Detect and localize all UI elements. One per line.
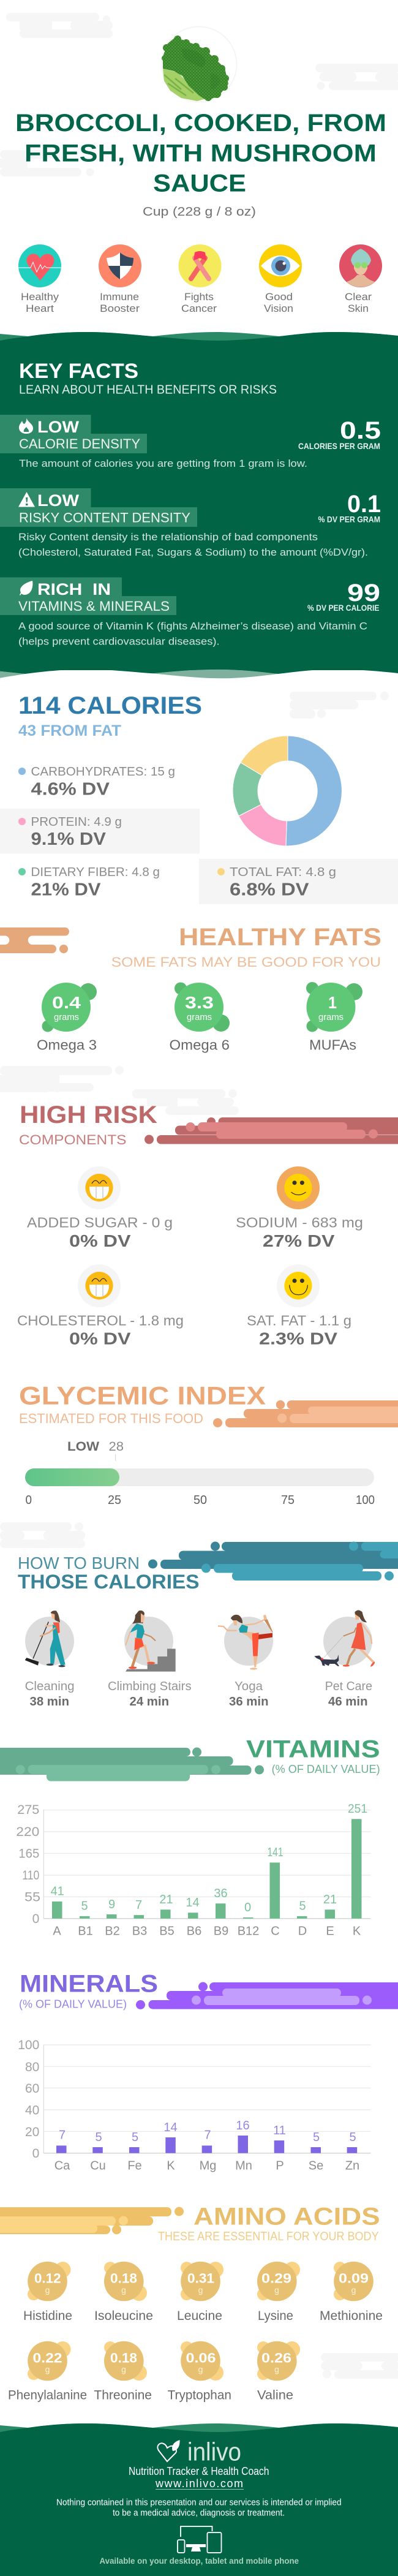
fact: risky content density: LOW [37,491,80,510]
title: SAUCE [153,170,246,197]
bar chart: minerals: Cu [90,2159,106,2173]
image: broccoli in a circle [162,27,236,102]
bar chart: vitamins: 7 [135,1898,142,1912]
bubble: omega 6: grams [187,1012,212,1022]
bar chart: minerals: 5 [95,2131,102,2144]
bar chart: vitamins: 0 [32,1912,39,1926]
activity: climbing stairs: 24 min [130,1695,169,1709]
bubble: omega 3: Omega 3 [37,1037,97,1053]
benefit labels: Booster [100,303,140,314]
legend: total fat: TOTAL FAT: 4.8 g [230,866,336,879]
legend: carbohydrates: CARBOHYDRATES: 15 g [31,765,175,779]
heading: healthy fats: HEALTHY FATS [179,924,381,951]
panel: key facts [0,332,398,678]
activity: pet care: 46 min [328,1695,367,1709]
bar chart: vitamins: B9 [214,1925,228,1938]
benefit labels: Cancer [181,303,217,314]
heading decoration [0,1747,264,1775]
amino: lysine [257,2262,300,2323]
amino: phenylalanine [8,2341,87,2403]
bar chart: minerals: 60 [25,2082,39,2096]
activity: cleaning [25,1611,75,1709]
amino: isoleucine: 0.18 [110,2271,137,2286]
fact: risky content density: RISKY CONTENT DENSITY [19,510,190,526]
bar chart: minerals: 5 [349,2131,356,2144]
heading decoration [145,1117,398,1144]
bar chart: vitamins: 275 [17,1803,39,1817]
fact: risky content density [0,488,381,558]
amino: tryptophan: g [198,2365,203,2374]
heading: HOW TO BURN [18,1554,140,1573]
activity: pet care: Pet Care [325,1680,372,1693]
heading: minerals: MINERALS [20,1970,158,1997]
gauge axis: 100 [356,1494,375,1507]
heading decoration [213,1400,398,1427]
amino: leucine: Leucine [177,2309,222,2323]
icon: cancer ribbon [179,244,222,287]
panel: minerals [18,1970,398,2173]
disclaimer: Nothing contained in this presentation and our services is intended or implied [56,2497,342,2507]
benefit labels: Heart [26,303,54,314]
bar chart: vitamins: D [298,1925,307,1938]
fact: risky content density: Risky Content density is the relationship of bad components [18,531,318,543]
bar chart: minerals: 100 [18,2038,39,2052]
bubble: omega 6 [169,983,230,1053]
panel: glycemic index [19,1381,398,1507]
gauge axis [26,1494,375,1507]
heading decoration [0,927,69,953]
subheading: THESE ARE ESSENTIAL FOR YOUR BODY [158,2230,379,2243]
availability note: Available on your desktop, tablet and mobile phone [99,2556,299,2566]
bubble: MUFAs: 1 [328,993,337,1012]
disclaimer [56,2497,342,2518]
fact: calorie density: CALORIES PER GRAM [298,441,380,451]
bar chart: vitamins: 110 [22,1868,39,1883]
bar chart: minerals: Fe [127,2159,142,2173]
panel: healthy fats [0,924,381,1053]
bar chart: vitamins: 5 [299,1899,306,1913]
bar chart: minerals: Ca [54,2159,70,2173]
disclaimer: to be a medical advice, diagnosis or treatment. [113,2507,285,2518]
bar chart: vitamins: 251 [348,1802,367,1816]
panel: amino acids [0,2204,383,2403]
activity: yoga [218,1615,273,1709]
subheading: (% OF DAILY VALUE) [272,1763,380,1775]
website link: www.inlivo.com [155,2477,243,2490]
heading: calories: 114 CALORIES [18,692,202,719]
bubble: omega 6: Omega 6 [169,1037,230,1053]
bar chart: vitamins: B3 [132,1925,147,1938]
bar chart: minerals: 5 [313,2131,320,2144]
legend: protein: PROTEIN: 4.9 g [31,815,122,829]
bar chart: minerals: 5 [132,2131,138,2144]
amino: lysine: Lysine [258,2309,293,2323]
bar chart: minerals: Mg [200,2159,216,2173]
bubble: MUFAs: grams [318,1012,344,1022]
bubble: omega 3: 0.4 [52,993,81,1012]
fact: rich in vitamins and minerals: (helps prevent cardiovascular diseases). [18,636,220,647]
panel: high risk components [17,1101,398,1348]
risk: saturated fat [247,1264,351,1348]
gauge axis: 50 [193,1494,207,1507]
fact: rich in vitamins and minerals: A good source of Vitamin K (fights Alzheimer’s disease) and Vitamin C [18,620,367,632]
amino: phenylalanine: g [45,2365,50,2374]
legend: carbohydrates [18,765,175,799]
bar chart: minerals: K [167,2159,175,2173]
amino: histidine [23,2262,72,2323]
legend: dietary fiber: 21% DV [31,880,101,899]
risk: cholesterol [17,1264,184,1348]
amino: isoleucine: g [121,2285,126,2295]
fact: risky content density: % DV PER GRAM [318,515,380,524]
icon: eye [259,244,302,287]
bar chart: minerals: Zn [345,2159,359,2173]
icon: healthy heart [18,244,61,287]
bar chart: minerals: 7 [59,2129,66,2142]
bar chart: minerals: 20 [25,2125,39,2139]
bar chart: vitamins: B12 [238,1925,259,1938]
bar chart: vitamins: 9 [108,1898,115,1911]
subheading: SOME FATS MAY BE GOOD FOR YOU [111,954,381,970]
fact: calorie density: The amount of calories you are getting from 1 gram is low. [19,458,307,469]
subheading: from fat: 43 FROM FAT [18,722,121,739]
legend: protein [18,815,122,849]
activity: climbing stairs [108,1611,192,1709]
amino: valine: g [274,2365,279,2374]
fact: rich in vitamins and minerals [0,577,380,647]
subheading: (% OF DAILY VALUE) [19,1998,127,2011]
benefit labels: Good [265,291,293,303]
gauge axis: 0 [26,1494,32,1507]
panel: footer [0,2423,398,2576]
amino: valine [257,2341,300,2403]
amino: threonine: 0.18 [110,2351,137,2366]
bar chart: vitamins: 21 [323,1893,337,1906]
bar chart: vitamins: E [326,1925,334,1938]
bar chart: minerals: P [276,2159,284,2173]
donut chart [233,736,342,846]
amino: lysine: 0.29 [261,2271,291,2286]
bar chart: vitamins: 55 [24,1890,40,1904]
risk: added sugar [27,1166,173,1250]
serving size: Cup (228 g / 8 oz) [143,205,256,219]
icon: devices [178,2526,222,2553]
bar chart: minerals: 80 [25,2060,39,2074]
bar chart: vitamins: 141 [267,1846,283,1859]
gauge axis: 75 [281,1494,295,1507]
activity: pet care [314,1610,375,1709]
panel: vitamins [0,1736,380,1938]
benefit labels: Vision [264,303,293,314]
legend: protein: 9.1% DV [31,829,107,849]
amino: methionine: g [351,2285,356,2295]
benefits row [18,244,382,314]
fact: rich in vitamins and minerals: VITAMINS & MINERALS [18,599,170,614]
amino: tryptophan [168,2341,231,2403]
bar chart: minerals: 7 [204,2129,211,2142]
amino: phenylalanine: 0.22 [33,2351,62,2366]
bar chart: minerals: 14 [163,2121,178,2134]
heading decoration [0,2207,184,2234]
title: BROCCOLI, COOKED, FROM [15,110,386,137]
bar chart: vitamins: 21 [159,1893,173,1906]
heading: amino acids: AMINO ACIDS [193,2204,380,2230]
logo wordmark: inlivo [187,2438,241,2466]
amino: valine: 0.26 [261,2351,291,2366]
bar chart: minerals: 16 [236,2119,250,2132]
activity: yoga: 36 min [229,1695,268,1709]
risk: cholesterol: CHOLESTEROL - 1.8 mg [17,1313,184,1329]
amino: leucine: g [198,2285,203,2295]
heading: glycemic index: GLYCEMIC INDEX [19,1381,266,1410]
risk: cholesterol: 0% DV [69,1329,131,1348]
amino: isoleucine: Isoleucine [94,2309,153,2323]
amino: valine: Valine [257,2389,293,2403]
bar chart: vitamins: B1 [78,1925,93,1938]
bubble: MUFAs [306,982,362,1053]
subheading: COMPONENTS [19,1132,126,1147]
fact: risky content density: 0.1 [347,491,381,518]
legend: total fat: 6.8% DV [230,880,309,899]
activity: cleaning: Cleaning [25,1680,75,1693]
activity: climbing stairs: Climbing Stairs [108,1680,192,1693]
bubble: MUFAs: MUFAs [309,1037,356,1053]
activity: yoga: Yoga [235,1680,263,1693]
bar chart: vitamins: B2 [105,1925,120,1938]
fact: calorie density: 0.5 [340,417,381,444]
subheading: ESTIMATED FOR THIS FOOD [19,1411,203,1426]
risk: sodium: 27% DV [263,1231,335,1250]
heading decoration [148,1541,398,1569]
bar chart: minerals: 0 [32,2147,39,2161]
fact: rich in vitamins and minerals: 99 [347,580,380,606]
amino: tryptophan: 0.06 [186,2351,216,2366]
title [15,110,386,197]
amino: lysine: g [274,2285,279,2295]
amino: threonine [94,2341,152,2403]
risk: saturated fat: SAT. FAT - 1.1 g [247,1313,351,1329]
bar chart: vitamins: C [271,1925,280,1938]
subheading: LEARN ABOUT HEALTH BENEFITS OR RISKS [19,383,277,397]
bar chart: vitamins [16,1802,370,1938]
heading: vitamins: VITAMINS [246,1736,380,1763]
risk: saturated fat: 2.3% DV [259,1329,337,1348]
amino: histidine: Histidine [23,2309,72,2323]
panel: calories [0,692,398,904]
amino: methionine [320,2262,383,2323]
benefit labels: Fights [184,291,214,303]
bar chart: minerals: Mn [235,2159,252,2173]
amino: phenylalanine: Phenylalanine [8,2389,87,2403]
fact: calorie density [0,415,381,469]
bar chart: vitamins: 165 [18,1846,39,1861]
bar chart: minerals: 11 [273,2124,286,2137]
bar chart: vitamins: 0 [244,1901,251,1914]
amino: leucine: 0.31 [187,2271,214,2286]
title: FRESH, WITH MUSHROOM [24,140,377,167]
bubble: omega 3 [37,983,97,1053]
legend: dietary fiber [18,866,160,899]
legend: total fat [217,866,336,899]
heading: key facts: KEY FACTS [19,360,138,383]
benefit labels [21,291,372,314]
amino: tryptophan: Tryptophan [168,2389,231,2403]
fact: risky content density: (Cholesterol, Saturated Fat, Sugars & Sodium) to the amount (%DV/gr). [18,546,368,558]
bar chart: minerals: Se [309,2159,323,2173]
fact: calorie density: CALORIE DENSITY [19,436,140,451]
bar chart: vitamins: B5 [159,1925,175,1938]
marker label: 28 [109,1440,124,1454]
panel: how to burn those calories [18,1541,398,1709]
icon: immune shield [99,244,141,287]
marker label: LOW [67,1440,99,1454]
bar chart: vitamins: A [53,1925,61,1938]
legend: dietary fiber: DIETARY FIBER: 4.8 g [31,866,160,879]
bar chart: vitamins: 220 [16,1825,39,1839]
amino: histidine: 0.12 [34,2271,61,2286]
benefit labels: Healthy [21,291,59,303]
activity: cleaning: 38 min [29,1695,69,1709]
bar chart: vitamins: 36 [214,1887,228,1900]
risk: added sugar: 0% DV [69,1231,131,1250]
marker label [67,1440,124,1461]
risk: sodium [236,1166,363,1250]
heading: high risk: HIGH RISK [20,1101,157,1128]
bar chart: vitamins: 5 [81,1899,88,1913]
risk: added sugar: ADDED SUGAR - 0 g [27,1215,173,1231]
bar chart: vitamins: K [353,1925,361,1938]
fact: calorie density: LOW [37,418,80,436]
benefit labels: Immune [100,291,139,303]
bar chart: vitamins: 41 [51,1884,64,1898]
icon: clear skin face [339,244,382,287]
heading decoration [136,1982,398,2009]
bar chart: minerals: 40 [25,2104,39,2117]
gauge axis: 25 [108,1494,121,1507]
benefit labels: Skin [348,303,369,314]
tagline: Nutrition Tracker & Health Coach [129,2465,269,2477]
bar chart: minerals [18,2038,370,2173]
risk: sodium: SODIUM - 683 mg [236,1215,363,1231]
bar chart: vitamins: B6 [187,1925,201,1938]
amino: leucine [177,2262,223,2323]
bubble: omega 3: grams [54,1012,79,1022]
bar chart: vitamins: 14 [186,1896,200,1909]
logo: inlivo heart [157,2440,180,2461]
amino: threonine: g [121,2365,126,2374]
bubble: omega 6: 3.3 [185,993,214,1012]
amino: isoleucine [94,2262,153,2323]
panel: how to burn those calories: THOSE CALORIES [18,1571,200,1593]
amino: methionine: 0.09 [339,2271,369,2286]
fact: rich in vitamins and minerals: % DV PER CALORIE [307,603,380,613]
amino: methionine: Methionine [320,2309,383,2323]
fact: rich in vitamins and minerals: RICH IN [37,580,111,599]
legend: carbohydrates: 4.6% DV [31,779,110,799]
benefit labels: Clear [345,291,372,303]
amino: histidine: g [45,2285,50,2295]
amino: threonine: Threonine [94,2389,152,2403]
legend panels [0,809,398,904]
gauge bar [25,1468,374,1486]
